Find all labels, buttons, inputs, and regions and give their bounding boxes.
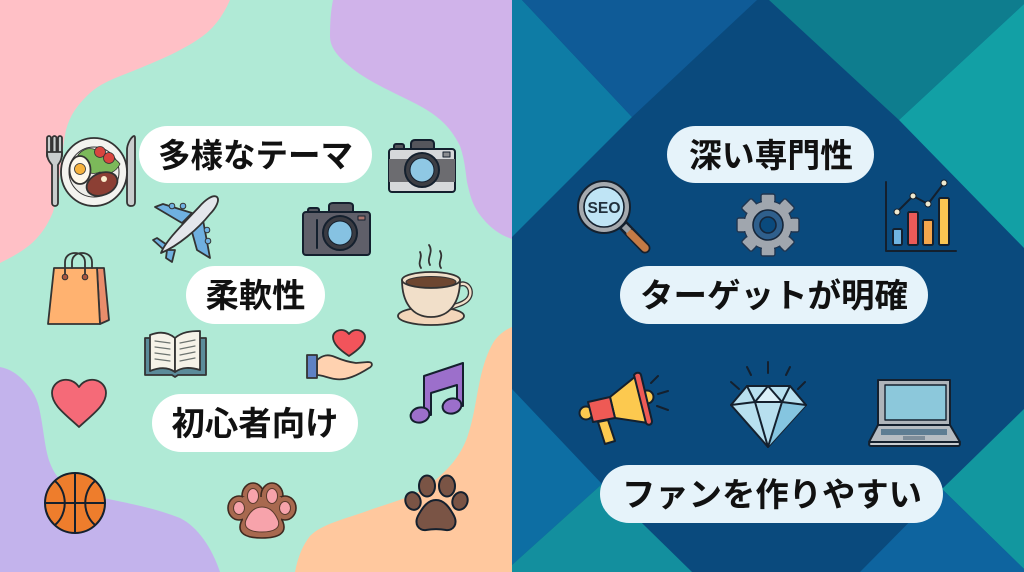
heading pill: ターゲットが明確: ターゲットが明確	[640, 277, 908, 314]
icon: hand holding heart	[307, 330, 372, 379]
heading pill: 柔軟性	[186, 266, 325, 324]
heading pill: ファンを作りやすい	[600, 465, 943, 523]
icon: SEO magnifier	[578, 181, 645, 248]
heading pill: ファンを作りやすい: ファンを作りやすい	[622, 476, 922, 513]
heading pill: 深い専門性	[667, 126, 874, 183]
icon: basketball	[45, 473, 105, 533]
icon: coffee cup	[398, 245, 470, 325]
icon: megaphone	[580, 373, 668, 444]
heading pill: 深い専門性: 深い専門性	[689, 137, 853, 174]
icon: heart	[52, 380, 106, 427]
facet: bottom right teal	[942, 409, 1024, 569]
heading pill: 多様なテーマ: 多様なテーマ	[158, 137, 353, 174]
icon: open book	[145, 331, 206, 377]
icon: pink paw	[228, 483, 296, 538]
icon: silver camera	[389, 140, 455, 192]
facet: bottom left blue	[512, 389, 602, 565]
facet: bottom left teal	[512, 484, 692, 572]
heading pill: 多様なテーマ	[139, 126, 372, 183]
heading pill: 柔軟性: 柔軟性	[206, 277, 306, 314]
icon: dark camera	[303, 203, 370, 255]
facet: right light teal	[899, 4, 1024, 248]
heading pill: ターゲットが明確	[620, 266, 928, 324]
facet: top right dark teal	[769, 0, 1024, 120]
icon: laptop	[869, 380, 960, 446]
icon: gear	[737, 194, 799, 256]
panel: specialist blog, geometric blue background	[512, 0, 1024, 572]
heading pill: 初心者向け: 初心者向け	[172, 405, 338, 442]
panel: general blog, pastel background	[0, 0, 512, 572]
icon: airplane	[153, 196, 218, 262]
heading pill: 初心者向け	[152, 394, 358, 452]
pink blob top left	[0, 0, 230, 263]
peach blob bottom right	[295, 327, 512, 572]
facet: top blue	[522, 0, 757, 117]
facet: bottom right blue	[860, 489, 1024, 572]
purple blob top right	[330, 0, 512, 239]
icon: bar and line chart	[886, 180, 956, 251]
icon: diamond	[731, 362, 806, 447]
lavender blob bottom left	[0, 367, 220, 572]
icon: plate with fork and knife	[47, 136, 135, 206]
icon: SEO magnifier: SEO	[588, 200, 620, 217]
icon: brown paw	[403, 476, 470, 530]
facet: top left teal-blue	[512, 0, 632, 237]
icon: music note	[409, 363, 463, 425]
icon: shopping bag	[48, 253, 109, 324]
